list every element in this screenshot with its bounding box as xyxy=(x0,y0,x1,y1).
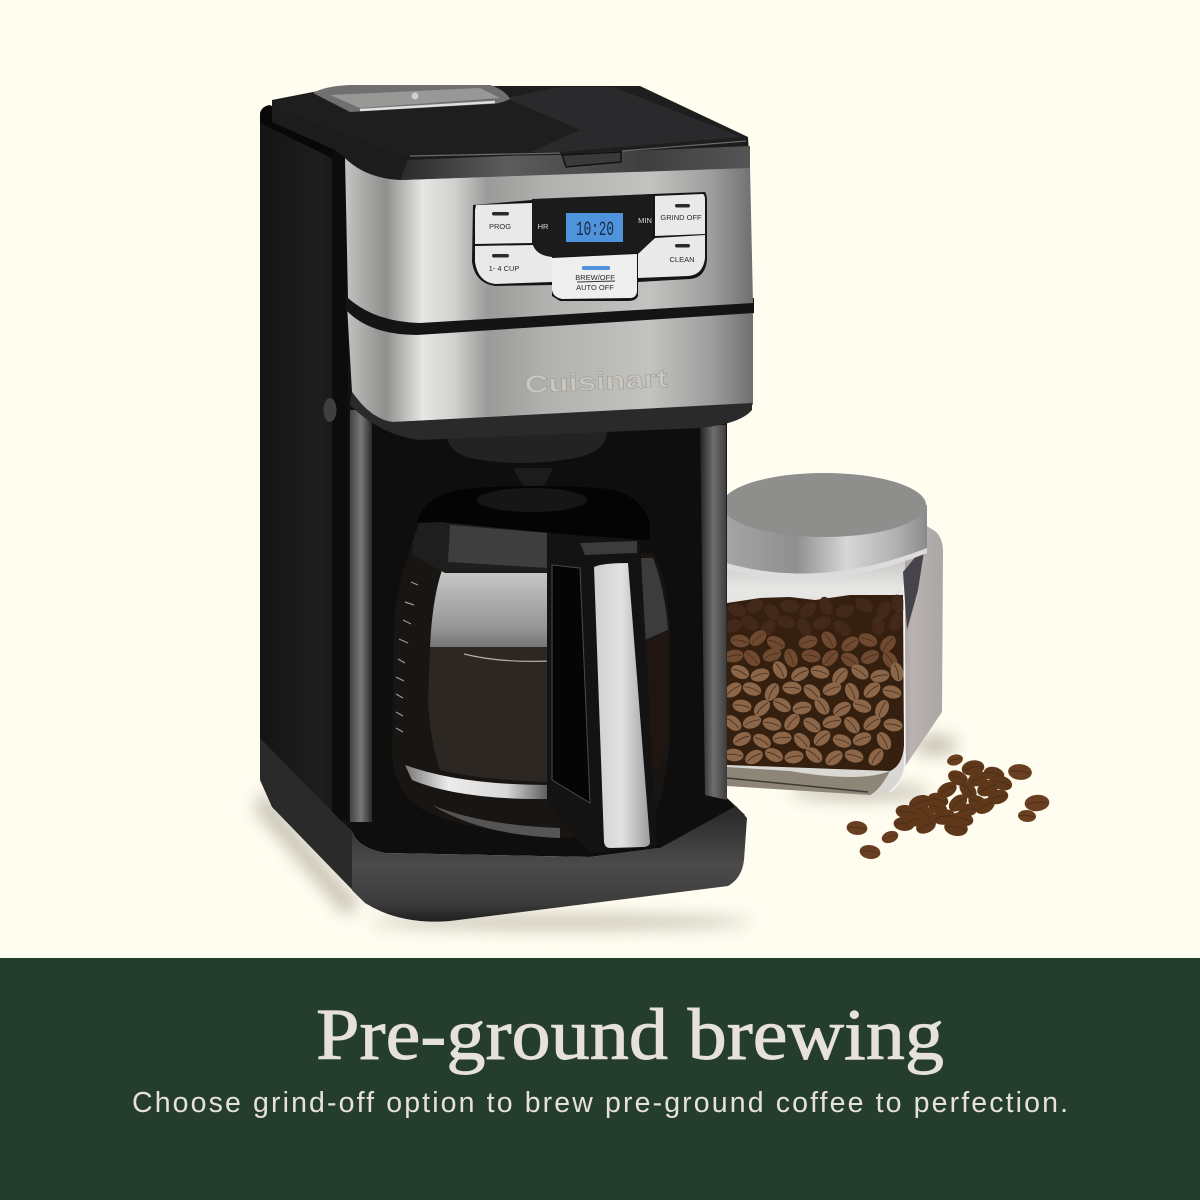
LCD display: 10:20 xyxy=(576,219,614,242)
glass jar of coffee beans xyxy=(722,473,943,795)
button: 1-4 CUP xyxy=(475,245,552,284)
coffee maker xyxy=(260,85,754,922)
right column xyxy=(700,425,727,800)
brew chamber interior xyxy=(350,415,745,857)
carafe chrome band xyxy=(405,765,550,799)
carafe right glass xyxy=(638,558,668,640)
carafe xyxy=(392,486,670,853)
bean hopper window xyxy=(313,85,510,112)
machine side knob xyxy=(324,398,336,422)
button: CLEAN: CLEAN xyxy=(669,255,695,264)
label: HR: HR xyxy=(538,222,549,231)
carafe handle xyxy=(547,533,657,853)
button: GRIND OFF xyxy=(655,194,705,236)
lid front edge highlight xyxy=(410,141,746,156)
carafe inner upper glass xyxy=(430,570,550,648)
jar metal lid xyxy=(722,473,927,579)
corner post xyxy=(332,150,348,820)
button: PROG: PROG xyxy=(489,222,511,231)
jar neck shadow xyxy=(903,545,925,630)
panel outline xyxy=(472,192,707,301)
button: GRIND OFF: GRIND OFF xyxy=(660,213,702,222)
carafe coffee xyxy=(428,647,550,782)
machine left side panel xyxy=(260,118,360,832)
carafe glass body xyxy=(392,540,670,838)
label: MIN: MIN xyxy=(638,216,652,225)
floor shadow xyxy=(255,735,957,929)
brew basket xyxy=(445,432,607,463)
machine base front xyxy=(352,806,747,922)
machine base side xyxy=(260,738,365,903)
panel: green caption band xyxy=(0,958,1200,1200)
coffee surface xyxy=(464,654,550,661)
button: 1-4 CUP: 1- 4 CUP xyxy=(489,264,519,273)
handle stainless strip xyxy=(594,563,650,848)
carafe band under lid xyxy=(412,520,550,573)
LCD display xyxy=(566,213,623,242)
handle top highlight xyxy=(580,541,637,555)
jar bean fill xyxy=(722,594,906,771)
top lid xyxy=(272,86,748,157)
button: BREW/OFF AUTO OFF xyxy=(552,254,637,299)
lid rim xyxy=(272,100,750,180)
housing underside xyxy=(350,392,752,440)
upper stainless housing xyxy=(345,158,753,323)
lid right panel xyxy=(506,87,742,152)
seam between housings xyxy=(346,293,754,335)
loose coffee beans xyxy=(846,753,1050,860)
lid latch xyxy=(562,152,621,167)
carafe valve xyxy=(513,468,553,488)
jar front corner highlight xyxy=(890,585,905,792)
title: Pre-ground brewing xyxy=(316,994,944,1075)
jar base glass xyxy=(727,767,890,795)
left column xyxy=(350,410,372,822)
handle window xyxy=(552,565,590,803)
carafe base lower glass xyxy=(432,805,560,838)
lower stainless housing xyxy=(347,305,753,422)
Cuisinart logo: Cuisinart xyxy=(524,365,669,399)
button: BREW/OFF AUTO OFF: BREW/OFF xyxy=(575,273,615,282)
jar glass side panel xyxy=(880,525,943,794)
button: BREW/OFF AUTO OFF: AUTO OFF xyxy=(576,283,614,292)
subtitle: Choose grind-off option to brew pre-ground coffee to perfection. xyxy=(132,1087,1068,1119)
jar glass front xyxy=(726,560,905,795)
display housing xyxy=(532,194,653,257)
side top rim xyxy=(260,105,350,158)
button: PROG xyxy=(475,203,532,244)
control panel xyxy=(472,192,707,301)
button: CLEAN xyxy=(638,235,705,278)
gauge tick marks xyxy=(396,582,418,732)
carafe lid xyxy=(417,486,650,540)
